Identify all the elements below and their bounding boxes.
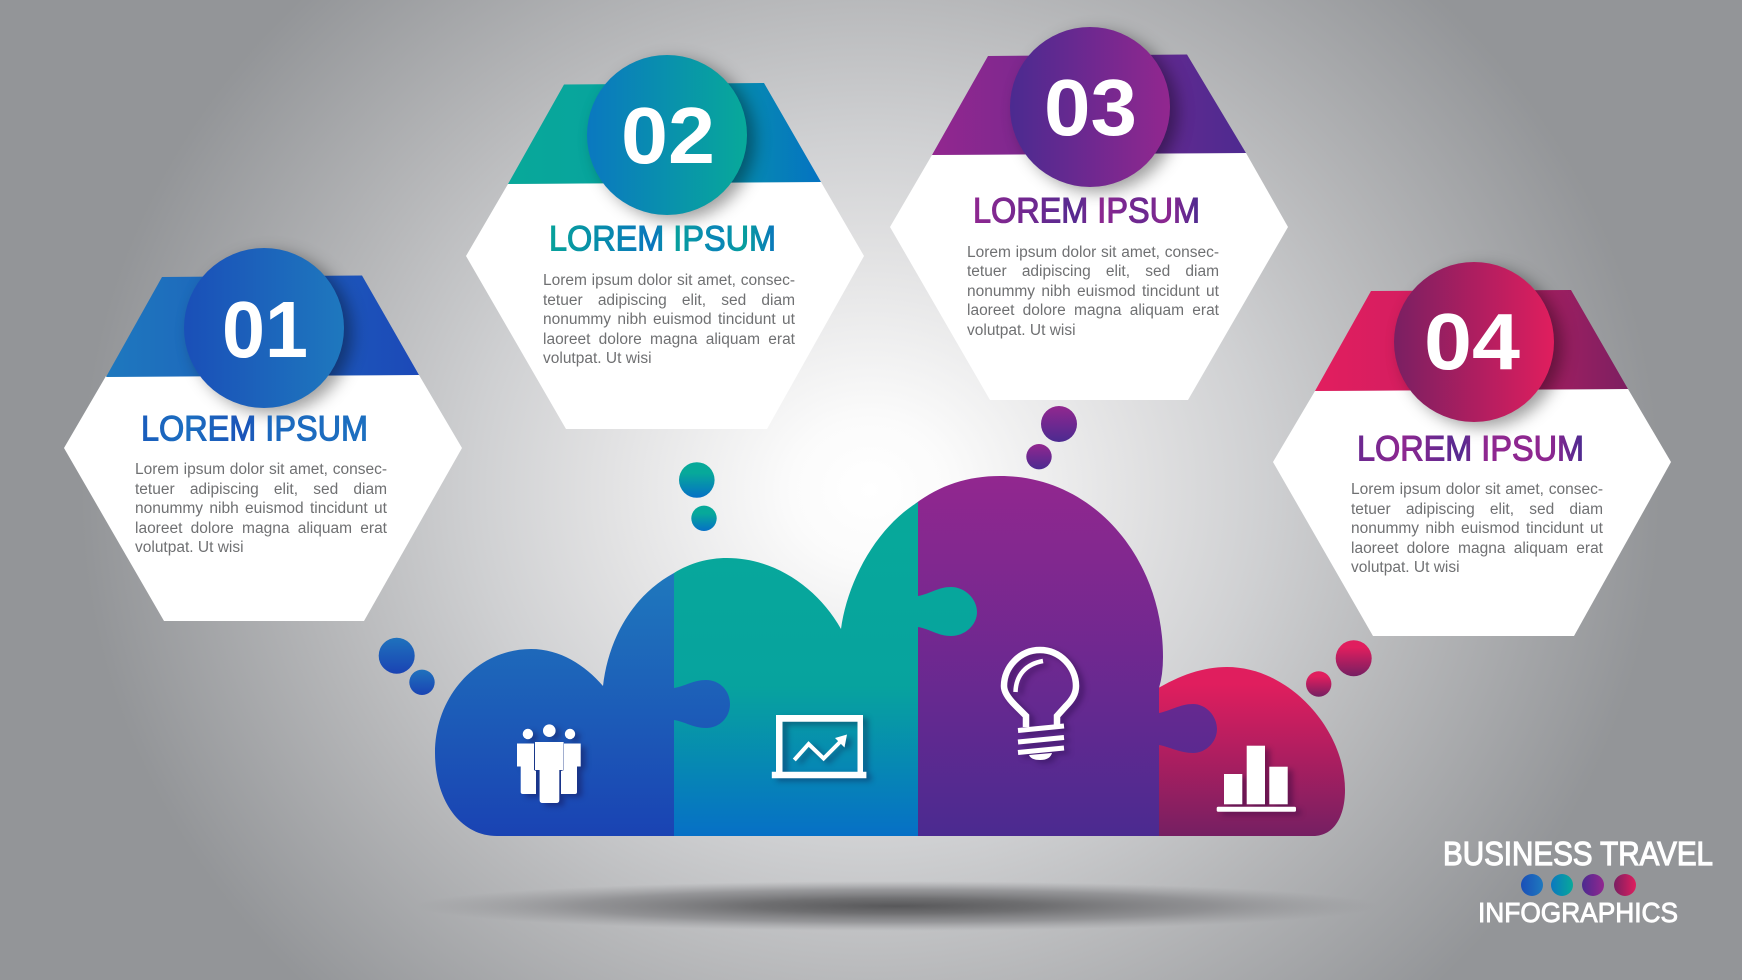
logo line two: INFOGRAPHICS <box>1478 897 1678 928</box>
heading: LOREM IPSUM <box>141 410 368 448</box>
white hexagon <box>466 182 864 429</box>
ground shadow <box>415 881 1379 931</box>
body text: nonummy nibh euismod tincidunt ut <box>1351 520 1603 537</box>
hexagon card 04 <box>1273 258 1671 636</box>
cloud piece: pink <box>1155 667 1345 836</box>
heading: LOREM IPSUM <box>549 220 776 258</box>
number circle <box>1010 27 1170 187</box>
number: 01 <box>222 285 308 374</box>
number circle <box>587 55 747 215</box>
puzzle cloud <box>435 476 1345 836</box>
number: 02 <box>621 91 715 180</box>
number: 03 <box>1044 63 1137 152</box>
icon: light bulb <box>1004 650 1076 760</box>
body text <box>543 272 795 367</box>
body text: volutpat. Ut wisi <box>543 350 652 367</box>
body text: laoreet dolore magna aliquam erat <box>967 302 1219 319</box>
panel: step 04 <box>1273 258 1671 636</box>
heading: LOREM IPSUM <box>973 192 1200 230</box>
body text: nonummy nibh euismod tincidunt ut <box>543 311 795 328</box>
bubbles: teal <box>679 462 717 531</box>
logo dots <box>1521 874 1636 896</box>
body text: tetuer adipiscing elit, sed diam <box>543 292 795 309</box>
number: 04 <box>1424 297 1521 386</box>
body text: Lorem ipsum dolor sit amet, consec- <box>543 272 795 289</box>
bubbles: purple <box>1026 406 1077 469</box>
colour band <box>932 54 1246 155</box>
body text <box>135 461 387 556</box>
panel: step 01 <box>64 244 462 621</box>
body text: Lorem ipsum dolor sit amet, consec- <box>135 461 387 478</box>
bubbles: pink <box>1306 640 1372 697</box>
icon: chart on laptop board <box>772 715 866 778</box>
body text <box>967 244 1219 339</box>
number circle <box>1394 262 1554 422</box>
number circle <box>184 248 344 408</box>
white hexagon <box>1273 389 1671 636</box>
body text: volutpat. Ut wisi <box>967 322 1076 339</box>
cloud piece: teal <box>674 502 977 836</box>
body text: laoreet dolore magna aliquam erat <box>1351 540 1603 557</box>
colour band <box>1315 290 1628 391</box>
body text: laoreet dolore magna aliquam erat <box>135 520 387 537</box>
white hexagon <box>890 153 1288 400</box>
white hexagon <box>64 375 462 621</box>
body text: nonummy nibh euismod tincidunt ut <box>967 283 1219 300</box>
body text: nonummy nibh euismod tincidunt ut <box>135 500 387 517</box>
body text: volutpat. Ut wisi <box>1351 559 1460 576</box>
body text: Lorem ipsum dolor sit amet, consec- <box>1351 481 1603 498</box>
body text: Lorem ipsum dolor sit amet, consec- <box>967 244 1219 260</box>
hexagon card 03 <box>890 23 1288 400</box>
panel: step 03 <box>890 23 1288 400</box>
cloud piece: blue <box>435 573 730 836</box>
hexagon card 02 <box>466 51 864 429</box>
icon: bar chart <box>1217 746 1296 812</box>
logo line one: BUSINESS TRAVEL <box>1443 835 1713 872</box>
logo: business travel infographics <box>1443 835 1713 928</box>
body text <box>1351 481 1603 576</box>
body text: tetuer adipiscing elit, sed diam <box>1351 501 1603 518</box>
bubbles: blue <box>379 638 435 695</box>
colour band <box>508 83 821 184</box>
body text: volutpat. Ut wisi <box>135 539 244 556</box>
body text: tetuer adipiscing elit, sed diam <box>135 481 387 498</box>
body text: laoreet dolore magna aliquam erat <box>543 331 795 348</box>
cloud piece: purple <box>915 476 1217 836</box>
heading: LOREM IPSUM <box>1357 430 1584 468</box>
panel: step 02 <box>466 51 864 429</box>
hexagon card 01 <box>64 244 462 621</box>
colour band <box>106 276 419 377</box>
body text: tetuer adipiscing elit, sed diam <box>967 263 1219 280</box>
icon: team of people <box>517 724 581 803</box>
